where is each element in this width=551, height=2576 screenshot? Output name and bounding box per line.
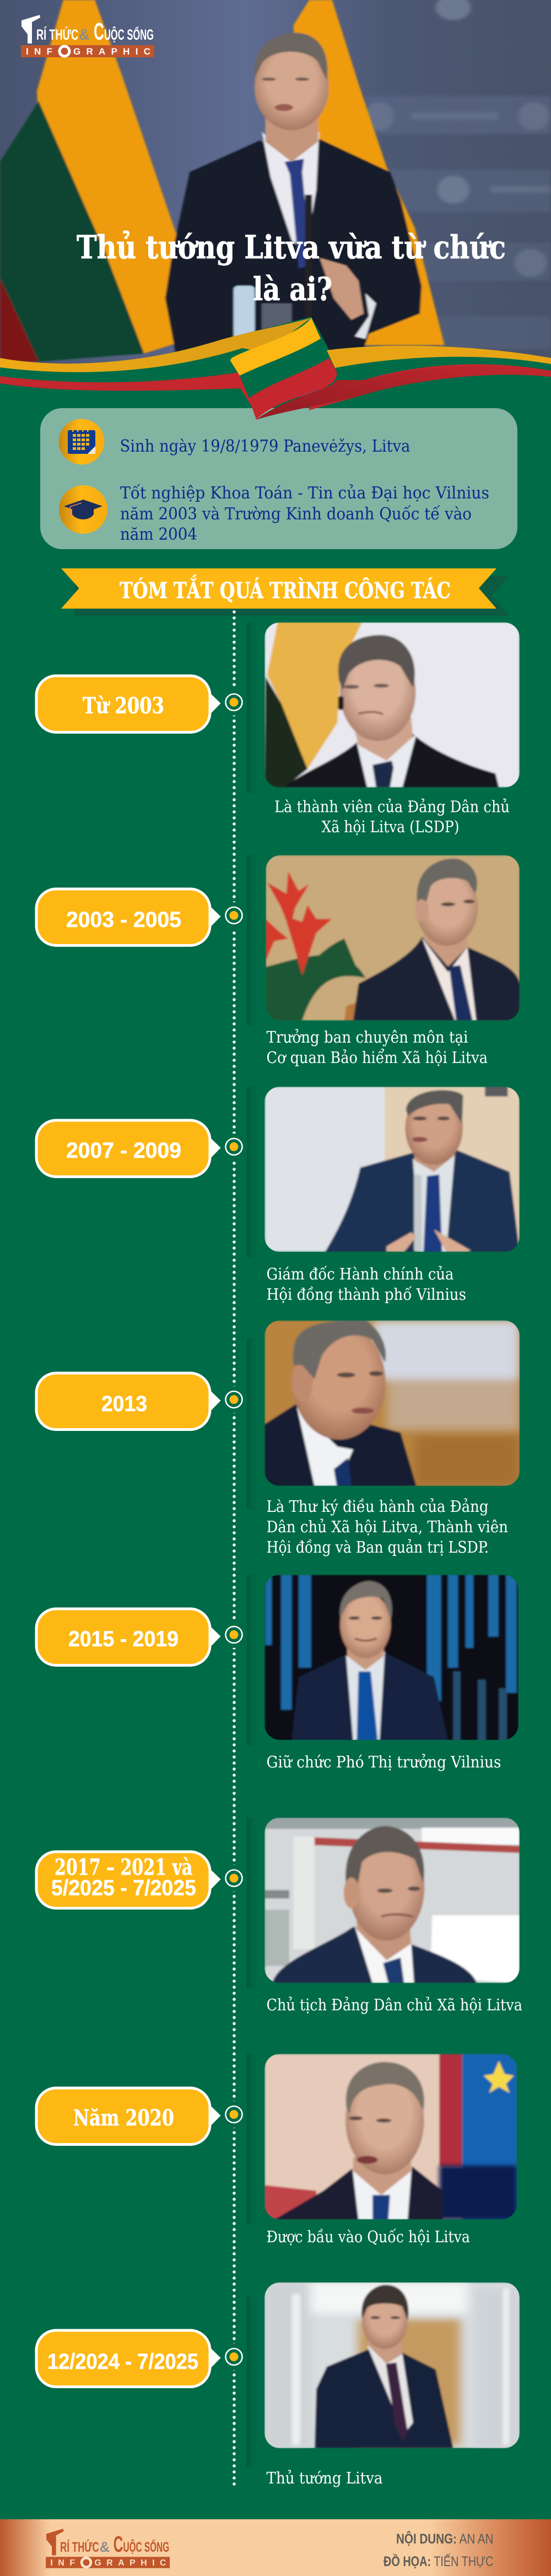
- footer credits: ĐỒ HỌA: TIẾN THỰC: [383, 2553, 494, 2569]
- timeline item 8: caption: Thủ tướng Litva: [267, 2469, 382, 2487]
- timeline item 2: pill: [36, 889, 220, 945]
- timeline item 1: caption: Xã hội Litva (LSDP): [322, 817, 460, 836]
- timeline item 7: caption: Được bầu vào Quốc hội Litva: [267, 2227, 470, 2246]
- education info text: năm 2004: [120, 525, 197, 544]
- timeline item 6: pill: [36, 1852, 220, 1908]
- education info text: [120, 484, 489, 544]
- header logo: RÍ THỨC: [36, 26, 78, 43]
- footer logo: GRAPHIC: [94, 2558, 166, 2568]
- section banner: [61, 568, 509, 616]
- header logo: GRAPHIC: [73, 46, 150, 57]
- timeline item 3: caption: Giám đốc Hành chính của: [267, 1265, 454, 1283]
- timeline item 3: caption: [267, 1265, 466, 1304]
- green backdrop under ribbon: [0, 372, 551, 405]
- timeline item 5: caption: Giữ chức Phó Thị trưởng Vilnius: [267, 1753, 501, 1771]
- header logo: INF: [26, 46, 52, 57]
- timeline item 2: caption: [267, 1028, 488, 1067]
- timeline item 6: pill: 5/2025 - 7/2025: [51, 1876, 196, 1900]
- timeline item 1: caption: [274, 798, 510, 836]
- header logo: UỘC SỐNG: [104, 25, 154, 43]
- timeline item 2: caption: Cơ quan Bảo hiểm Xã hội Litva: [267, 1048, 488, 1067]
- timeline item 5: photo: [264, 1575, 518, 1742]
- timeline item 5: pill: [36, 1609, 220, 1666]
- timeline item 7: pill: Năm 2020: [73, 2105, 174, 2131]
- banner heading: TÓM TẮT QUÁ TRÌNH CÔNG TÁC: [120, 575, 451, 604]
- timeline item 3: photo: [264, 1087, 520, 1252]
- ribbon centre fold: green: [240, 339, 329, 398]
- timeline item 6: photo: [264, 1818, 520, 1983]
- icon: graduation cap: [59, 485, 107, 534]
- timeline item 3: pill: [36, 1120, 220, 1176]
- timeline item 2: pill: 2003 - 2005: [66, 908, 181, 932]
- education info text: Tốt nghiệp Khoa Toán - Tin của Đại học Vilnius: [120, 484, 489, 503]
- icon: calendar: [58, 419, 105, 465]
- timeline item 7: photo: [264, 2054, 517, 2220]
- timeline item 4: pill: 2013: [101, 1392, 147, 1416]
- birth info text: Sinh ngày 19/8/1979 Panevėžys, Litva: [120, 437, 410, 456]
- timeline item 1: pill: [36, 676, 220, 733]
- header logo: [21, 15, 154, 57]
- footer: [0, 2519, 551, 2576]
- timeline item 1: photo: [264, 622, 520, 788]
- footer logo: [46, 2529, 170, 2568]
- timeline item 4: caption: [267, 1497, 508, 1557]
- education info text: năm 2003 và Trường Kinh doanh Quốc tế vào: [120, 505, 472, 524]
- hero title: [77, 229, 506, 308]
- timeline item 4: photo: [264, 1320, 520, 1486]
- photo side shadows: [247, 622, 259, 793]
- timeline item 8: pill: [36, 2330, 220, 2387]
- timeline item 4: pill: [36, 1373, 220, 1430]
- footer logo: RÍ THỨC: [60, 2539, 99, 2555]
- header logo: C: [94, 18, 104, 45]
- hero title: Thủ tướng Litva vừa từ chức: [77, 229, 506, 266]
- timeline item 3: caption: Hội đồng thành phố Vilnius: [267, 1285, 466, 1304]
- footer logo: &: [100, 2539, 110, 2555]
- footer logo: C: [114, 2531, 123, 2557]
- flag ribbon: [0, 317, 551, 420]
- timeline item 6: caption: Chủ tịch Đảng Dân chủ Xã hội Litva: [267, 1995, 522, 2014]
- timeline item 4: caption: Là Thư ký điều hành của Đảng: [267, 1497, 488, 1516]
- header logo: &: [79, 26, 90, 43]
- timeline item 8: photo: [264, 2282, 520, 2448]
- hero title: là ai?: [253, 270, 332, 308]
- timeline item 3: pill: 2007 - 2009: [66, 1138, 181, 1163]
- info panel: [40, 408, 517, 549]
- timeline dotted line: [221, 612, 247, 2487]
- footer credits: [383, 2530, 494, 2569]
- footer credits: NỘI DUNG: AN AN: [396, 2530, 494, 2547]
- timeline item 2: caption: Trưởng ban chuyên môn tại: [267, 1028, 468, 1046]
- timeline item 1: caption: Là thành viên của Đảng Dân chủ: [274, 798, 510, 816]
- timeline item 1: pill: Từ 2003: [83, 693, 164, 719]
- timeline item 4: caption: Hội đồng và Ban quản trị LSDP.: [267, 1538, 489, 1557]
- timeline item 5: pill: 2015 - 2019: [68, 1627, 179, 1651]
- timeline item 4: caption: Dân chủ Xã hội Litva, Thành viên: [267, 1517, 508, 1536]
- timeline item 2: photo: [266, 855, 520, 1021]
- timeline item 7: pill: [36, 2088, 220, 2145]
- ribbon centre fold: red: [249, 358, 337, 420]
- hero photo: prime minister at press conference with flags: [0, 0, 551, 397]
- footer logo: UỘC SỐNG: [123, 2539, 169, 2555]
- timeline item 8: pill: 12/2024 - 7/2025: [47, 2350, 198, 2374]
- footer logo: INF: [50, 2558, 75, 2568]
- timeline item 6: pill: 2017 – 2021 và: [55, 1854, 193, 1880]
- ribbon red tail: [256, 366, 551, 420]
- ribbon centre fold: yellow: [230, 318, 321, 376]
